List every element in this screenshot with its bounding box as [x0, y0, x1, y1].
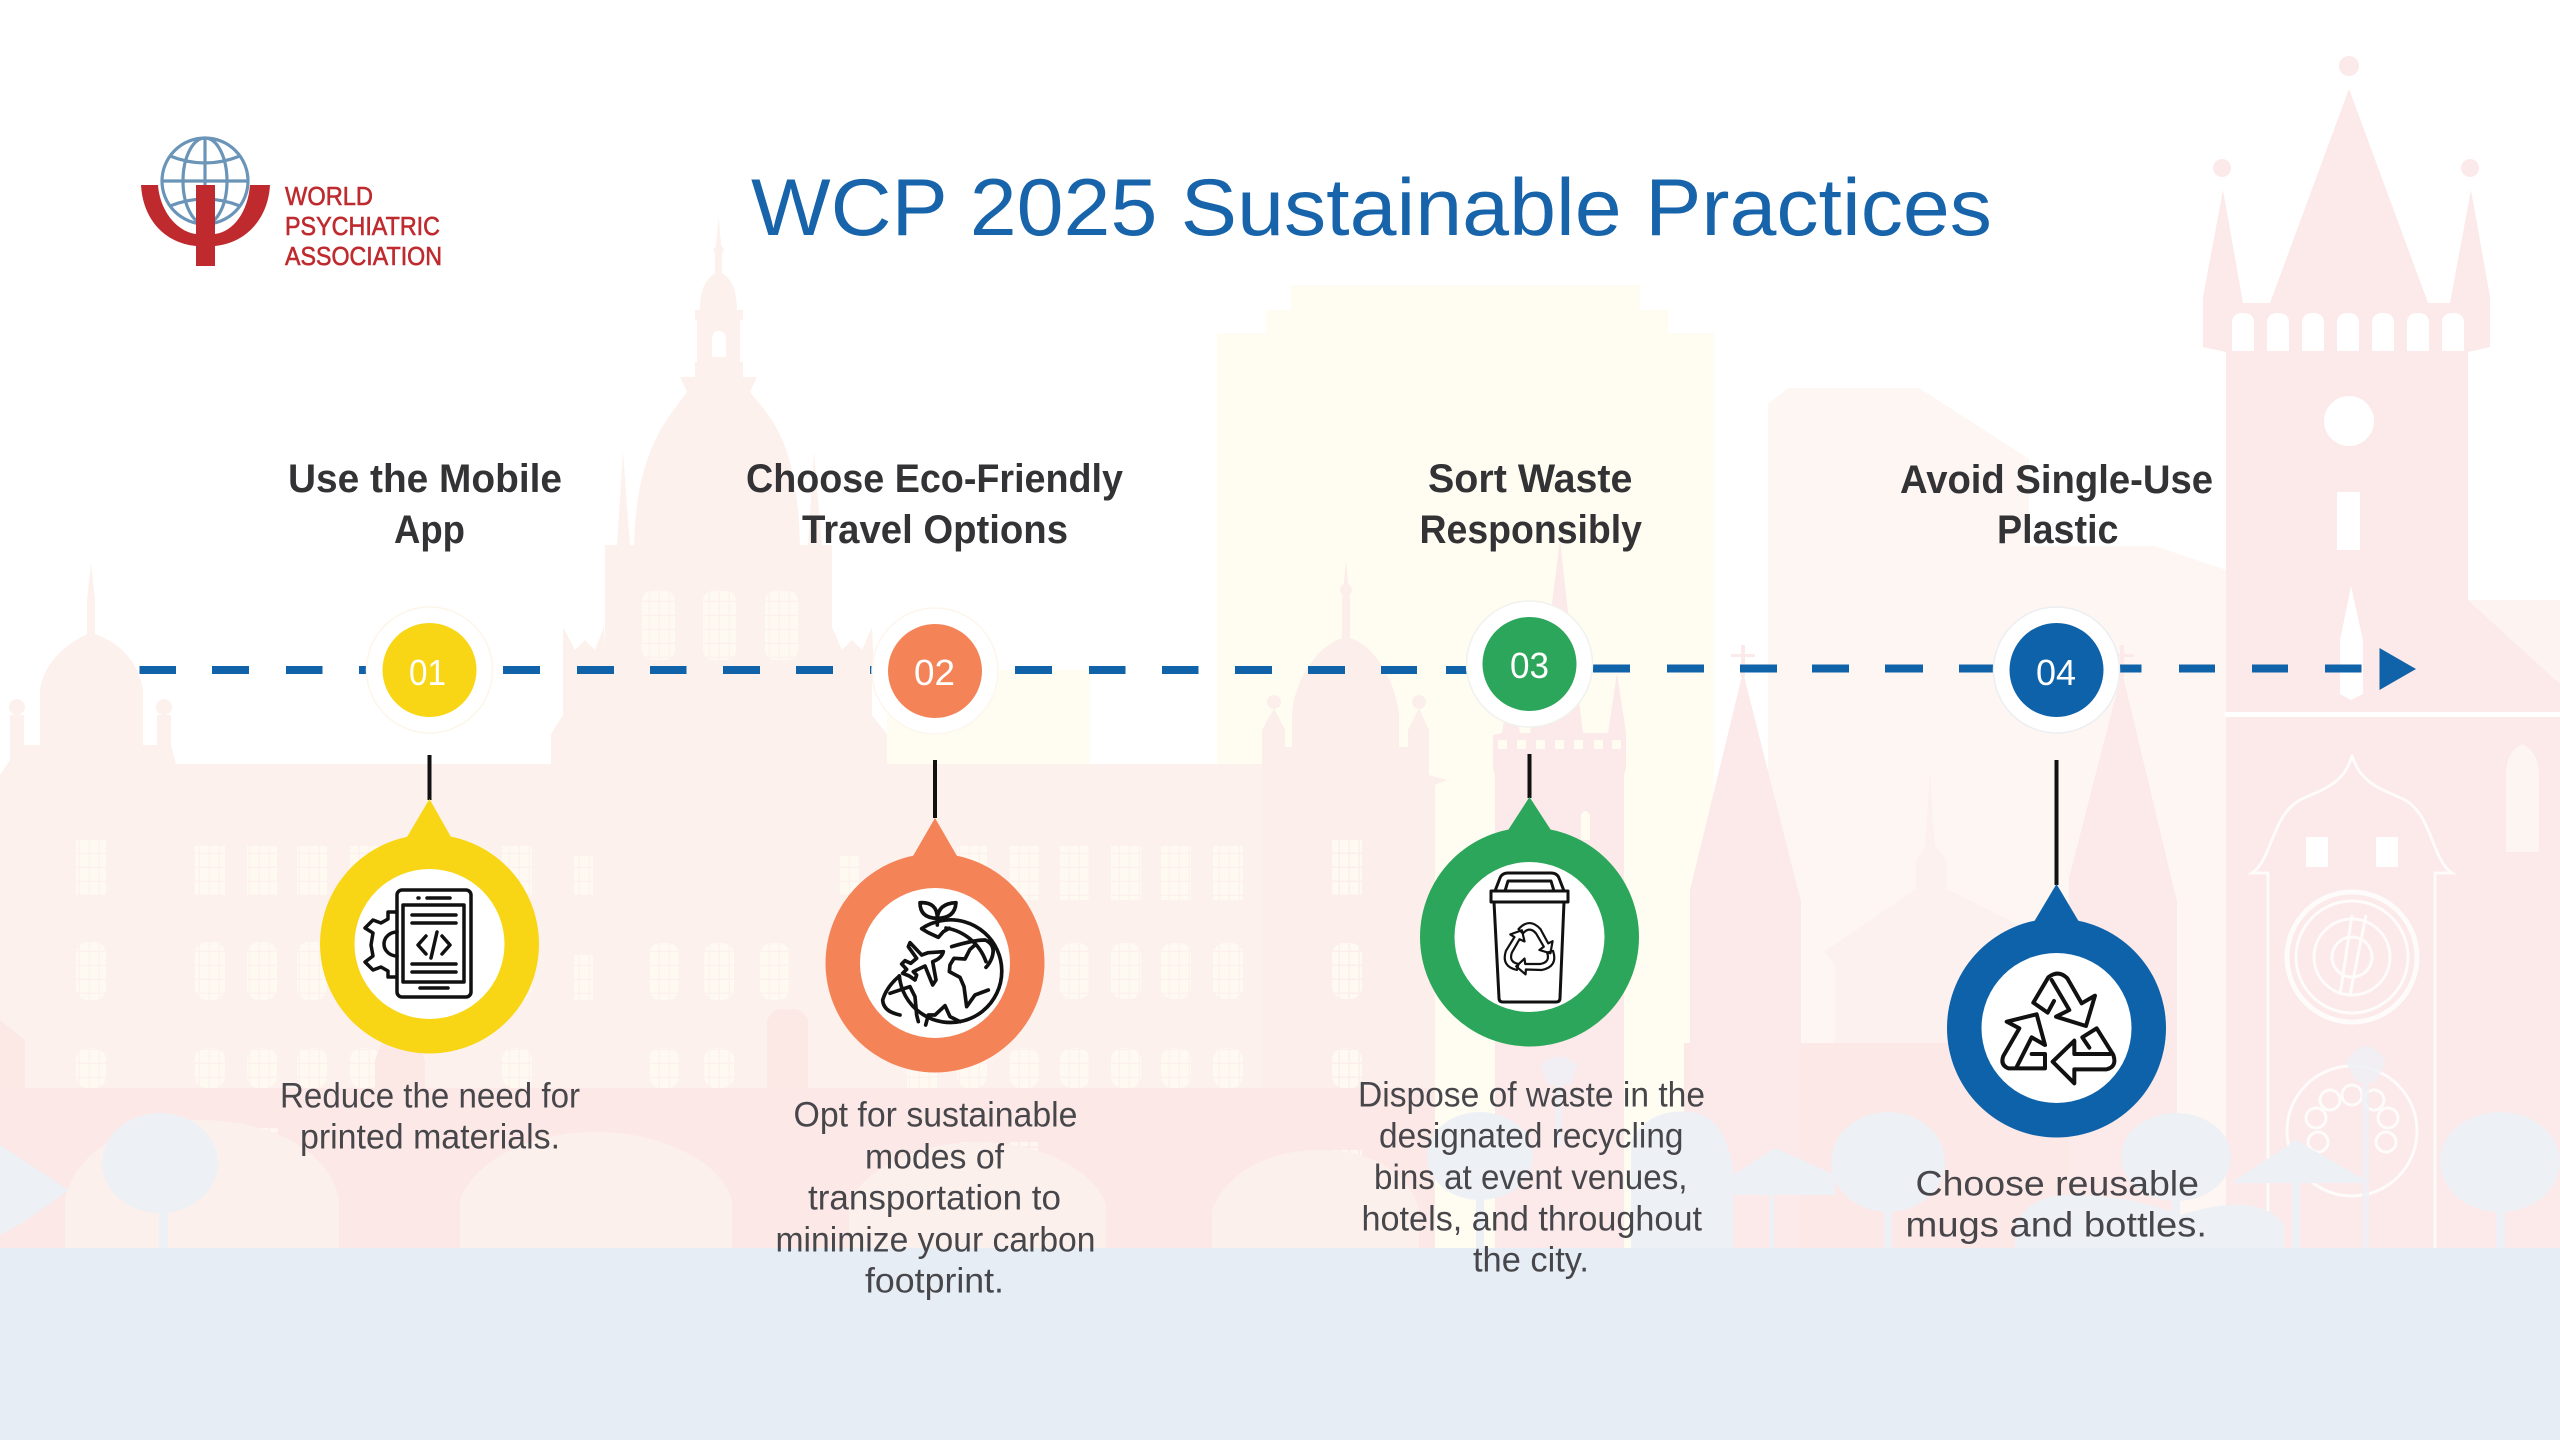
description: footprint.	[865, 1262, 1004, 1300]
icon: globe with plane and sprout	[883, 903, 1002, 1025]
number badge 04	[1994, 607, 2120, 733]
heading: Travel Options	[802, 508, 1068, 552]
pin	[826, 818, 1044, 1072]
icon: psi symbol	[141, 185, 270, 266]
icon: recycle arrows	[2002, 974, 2114, 1083]
logo text: PSYCHIATRIC	[285, 211, 440, 241]
windows of left palace	[76, 591, 1362, 1088]
description: hotels, and throughout	[1362, 1200, 1702, 1238]
bridge statues	[0, 1009, 808, 1090]
panel: step 3 sort waste	[1358, 457, 1705, 1280]
panel: step 2 eco-friendly travel	[746, 457, 1124, 1300]
bridge arches	[65, 1120, 1419, 1248]
connector	[2054, 760, 2058, 885]
number badge 01	[366, 607, 492, 733]
description: Opt for sustainable	[794, 1096, 1078, 1134]
small church	[1824, 771, 2069, 1043]
heading	[288, 457, 562, 552]
lower bridge band	[0, 1043, 2177, 1248]
description: the city.	[1473, 1240, 1589, 1280]
old town clock tower	[2203, 56, 2560, 1248]
description	[1358, 1076, 1705, 1280]
description: designated recycling	[1379, 1116, 1684, 1156]
icon: phone with gear and code	[365, 890, 471, 997]
description: modes of	[865, 1138, 1004, 1176]
cream central building	[887, 285, 1714, 1248]
left palace silhouette with main dome	[0, 217, 1262, 1248]
arrow head	[2380, 648, 2416, 690]
panel: step 1 use the mobile app	[280, 457, 580, 1156]
description: transportation to	[808, 1178, 1061, 1218]
connector	[933, 760, 937, 818]
title: WCP 2025 Sustainable Practices	[751, 163, 1992, 253]
second dome	[1262, 560, 1447, 1248]
heading	[1420, 457, 1643, 552]
connector	[428, 755, 432, 800]
number badge 03: 03	[1510, 645, 1549, 686]
heading: Sort Waste	[1428, 457, 1632, 501]
pale pink distant building	[1768, 388, 2226, 1248]
bridge tower	[1493, 540, 1626, 1248]
bottom band	[0, 1248, 2560, 1440]
panel: step 4 avoid single-use plastic	[1900, 458, 2213, 1244]
heading	[1900, 458, 2213, 552]
description: minimize your carbon	[776, 1220, 1096, 1260]
number badge 03	[1466, 601, 1592, 727]
number badge 02: 02	[914, 652, 955, 693]
description: bins at event venues,	[1374, 1158, 1688, 1197]
number badge 02	[872, 608, 998, 734]
logo: World Psychiatric Association	[141, 138, 442, 271]
heading: Plastic	[1997, 508, 2118, 552]
number badge 01: 01	[409, 652, 446, 693]
right church spires	[1690, 645, 2177, 1248]
description	[776, 1096, 1096, 1300]
description	[1906, 1164, 2207, 1244]
windows in lower band	[196, 1128, 1362, 1180]
logo text	[285, 181, 442, 271]
description: Choose reusable	[1916, 1164, 2199, 1204]
timeline: dashed arrow line	[140, 648, 2416, 690]
icon: globe	[162, 138, 248, 224]
connector	[1528, 754, 1532, 798]
description: Dispose of waste in the	[1358, 1076, 1705, 1114]
trees and lamps	[0, 1046, 2560, 1248]
heading: App	[394, 508, 465, 552]
pin	[1420, 797, 1639, 1046]
heading: Responsibly	[1420, 508, 1643, 552]
description: mugs and bottles.	[1906, 1206, 2207, 1244]
icon: recycling bin	[1491, 873, 1568, 1002]
description: printed materials.	[300, 1118, 560, 1156]
pin	[320, 799, 539, 1054]
heading	[746, 457, 1124, 552]
logo text: WORLD	[285, 181, 373, 211]
number badge 04: 04	[2036, 652, 2076, 693]
heading: Choose Eco-Friendly	[746, 457, 1124, 501]
description	[280, 1076, 580, 1156]
logo text: ASSOCIATION	[285, 241, 442, 271]
description: Reduce the need for	[280, 1076, 580, 1116]
heading: Avoid Single-Use	[1900, 458, 2213, 502]
heading: Use the Mobile	[288, 457, 562, 501]
pin	[1947, 884, 2166, 1138]
